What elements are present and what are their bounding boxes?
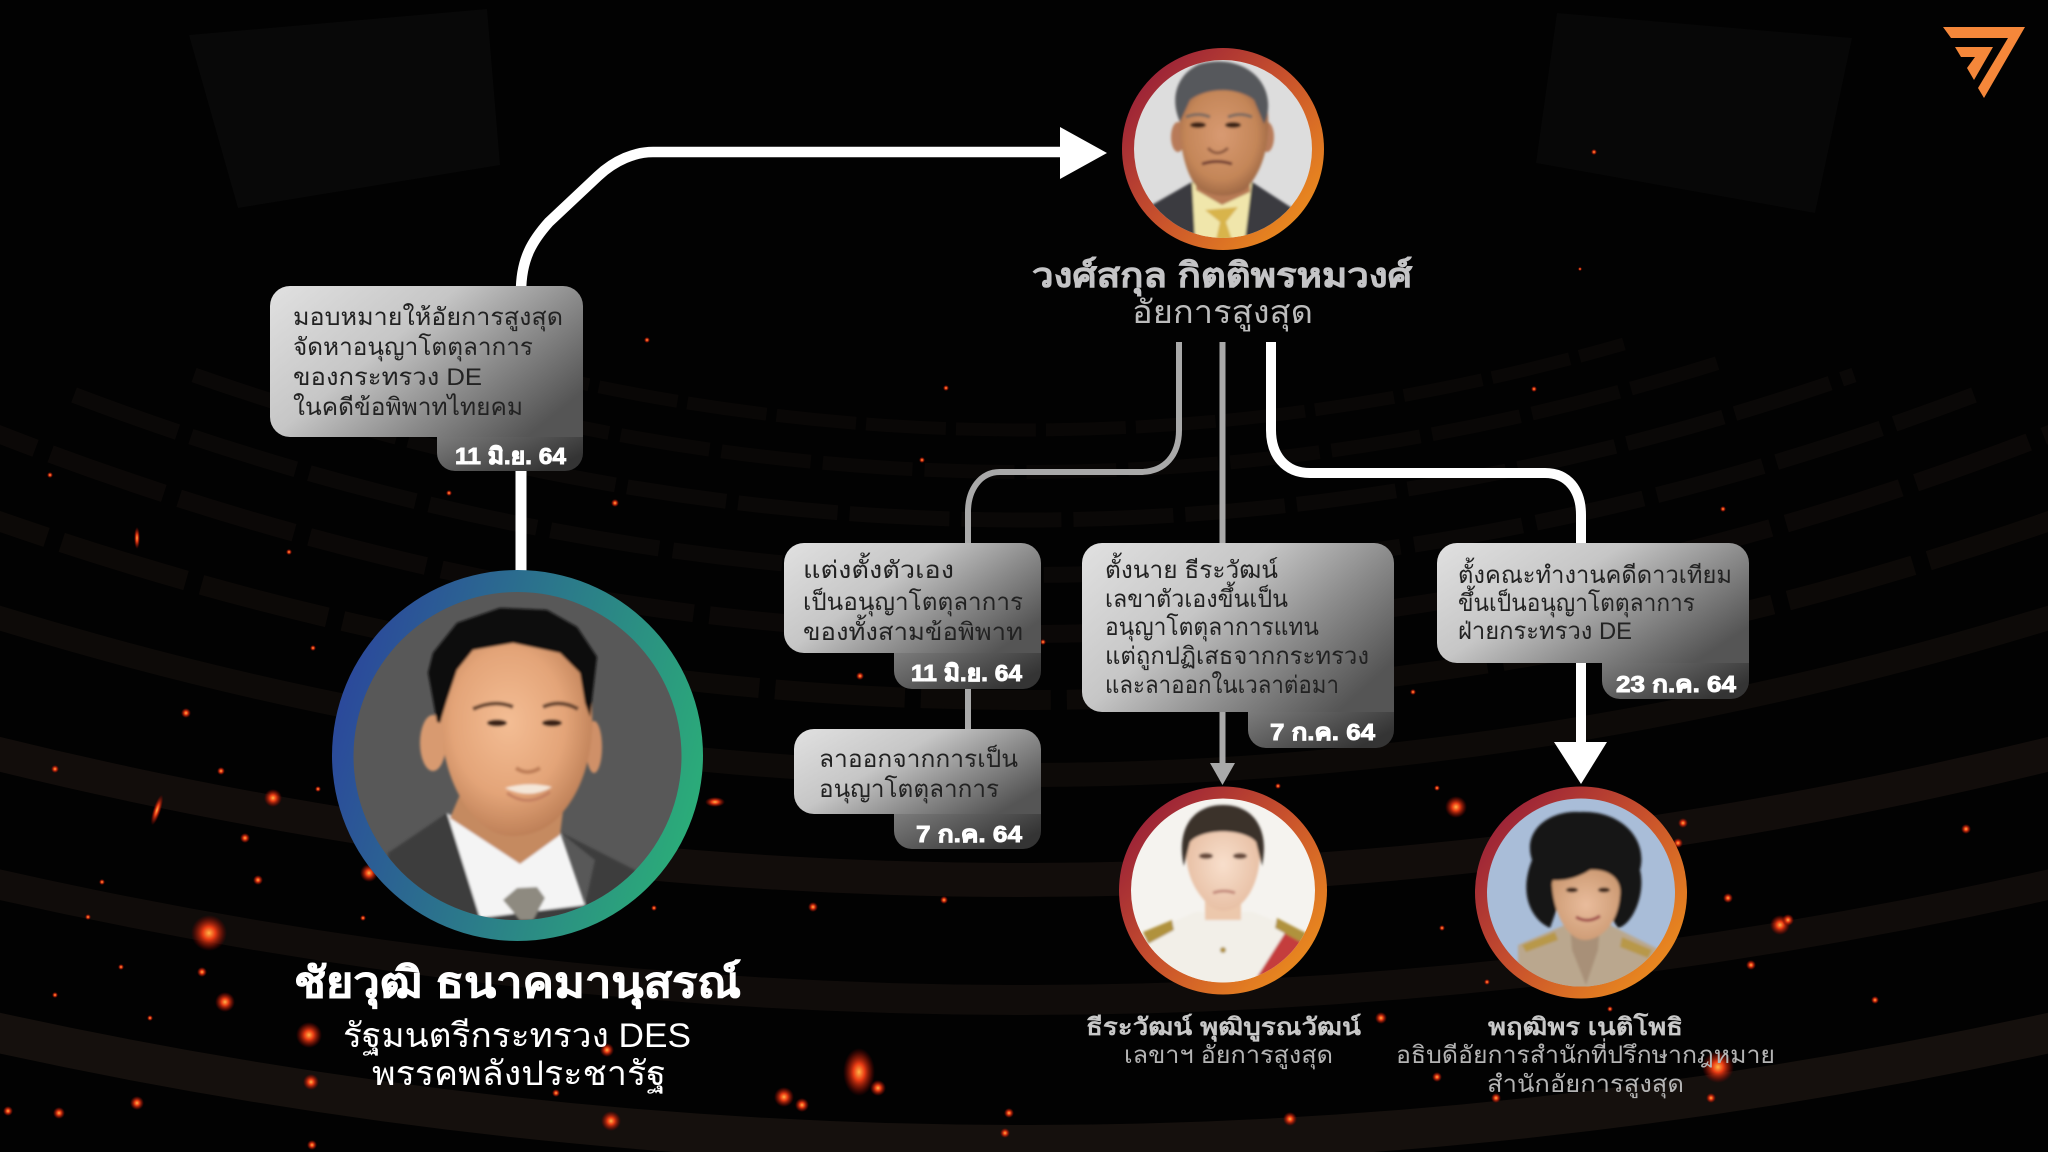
- panel: assignment box: [270, 286, 583, 471]
- panel: resignation box: [794, 729, 1041, 849]
- panel: secretary appointment box: [1082, 543, 1394, 748]
- panel: assignment box: มอบหมายให้อัยการสูงสุด: [293, 303, 563, 332]
- portrait: Pruttiporn: [1475, 786, 1687, 998]
- label: Thirawat: เลขาฯ อัยการสูงสุด: [1124, 1042, 1333, 1070]
- label: Thirawat: [1086, 1013, 1362, 1070]
- arrow: minister to attorney general: [521, 127, 1107, 292]
- connector: minister portrait to assignment box: [516, 465, 526, 575]
- panel: self appointment box: [784, 543, 1041, 689]
- label: Thirawat: ธีระวัฒน์ พุฒิบูรณวัฒน์: [1086, 1013, 1362, 1043]
- label: Chaiwut: [294, 959, 741, 1094]
- panel: secretary appointment box: เลขาตัวเองขึ้นเป็น: [1105, 581, 1288, 613]
- panel: secretary appointment box: 7 ก.ค. 64: [1270, 719, 1375, 745]
- panel: secretary appointment box: อนุญาโตตุลาการแทน: [1105, 613, 1319, 642]
- panel: assignment box: จัดหาอนุญาโตตุลาการ: [293, 333, 533, 362]
- logo: [1943, 27, 2025, 98]
- label: Chaiwut: พรรคพลังประชารัฐ: [372, 1055, 666, 1094]
- panel: self appointment box: เป็นอนุญาโตตุลาการ: [803, 587, 1023, 617]
- label: Pruttiporn: [1396, 1012, 1775, 1099]
- panel: self appointment box: ของทั้งสามข้อพิพาท: [803, 614, 1023, 646]
- panel: resignation box: ลาออกจากการเป็น: [819, 744, 1018, 773]
- panel: assignment box: 11 มิ.ย. 64: [455, 443, 566, 469]
- panel: working group box: [1437, 543, 1749, 699]
- panel: secretary appointment box: และลาออกในเวลาต่อมา: [1105, 671, 1339, 699]
- label: Wongsakul: วงศ์สกุล กิตติพรหมวงศ์: [1032, 256, 1412, 297]
- panel: secretary appointment box: แต่ถูกปฏิเสธจากกระทรวง: [1105, 643, 1369, 671]
- label: Chaiwut: ชัยวุฒิ ธนาคมานุสรณ์: [294, 959, 741, 1009]
- panel: working group box: ตั้งคณะทำงานคดีดาวเทียม: [1458, 557, 1732, 589]
- arrow: attorney general to working group: [1271, 342, 1607, 784]
- arrow: attorney general to secretary: [1210, 342, 1235, 785]
- label: Pruttiporn: พฤฒิพร เนติโพธิ: [1488, 1012, 1683, 1041]
- panel: resignation box: 7 ก.ค. 64: [916, 821, 1022, 847]
- panel: working group box: 23 ก.ค. 64: [1616, 671, 1736, 697]
- label: Pruttiporn: อธิบดีอัยการสำนักที่ปรึกษากฎหมาย: [1396, 1038, 1775, 1069]
- panel: working group box: ขึ้นเป็นอนุญาโตตุลาการ: [1458, 585, 1695, 618]
- label: Chaiwut: รัฐมนตรีกระทรวง DES: [343, 1017, 691, 1056]
- label: Wongsakul: [1032, 256, 1412, 332]
- panel: self appointment box: แต่งตั้งตัวเอง: [803, 552, 954, 584]
- label: Pruttiporn: สำนักอัยการสูงสุด: [1487, 1071, 1684, 1099]
- portrait: Wongsakul: [1122, 48, 1324, 250]
- connector: attorney general to self appointment: [968, 342, 1179, 545]
- panel: self appointment box: 11 มิ.ย. 64: [911, 660, 1022, 686]
- label: Wongsakul: อัยการสูงสุด: [1132, 294, 1313, 332]
- connector: self appointment to resignation: [965, 689, 971, 731]
- panel: assignment box: ของกระทรวง DE: [293, 364, 482, 391]
- panel: assignment box: ในคดีข้อพิพาทไทยคม: [293, 393, 523, 421]
- portrait: Thirawat: [1119, 786, 1327, 994]
- panel: secretary appointment box: ตั้งนาย ธีระวัฒน์: [1105, 552, 1278, 584]
- panel: working group box: ฝ่ายกระทรวง DE: [1458, 618, 1632, 645]
- panel: resignation box: อนุญาโตตุลาการ: [819, 775, 999, 804]
- portrait: Chaiwut: [332, 570, 703, 941]
